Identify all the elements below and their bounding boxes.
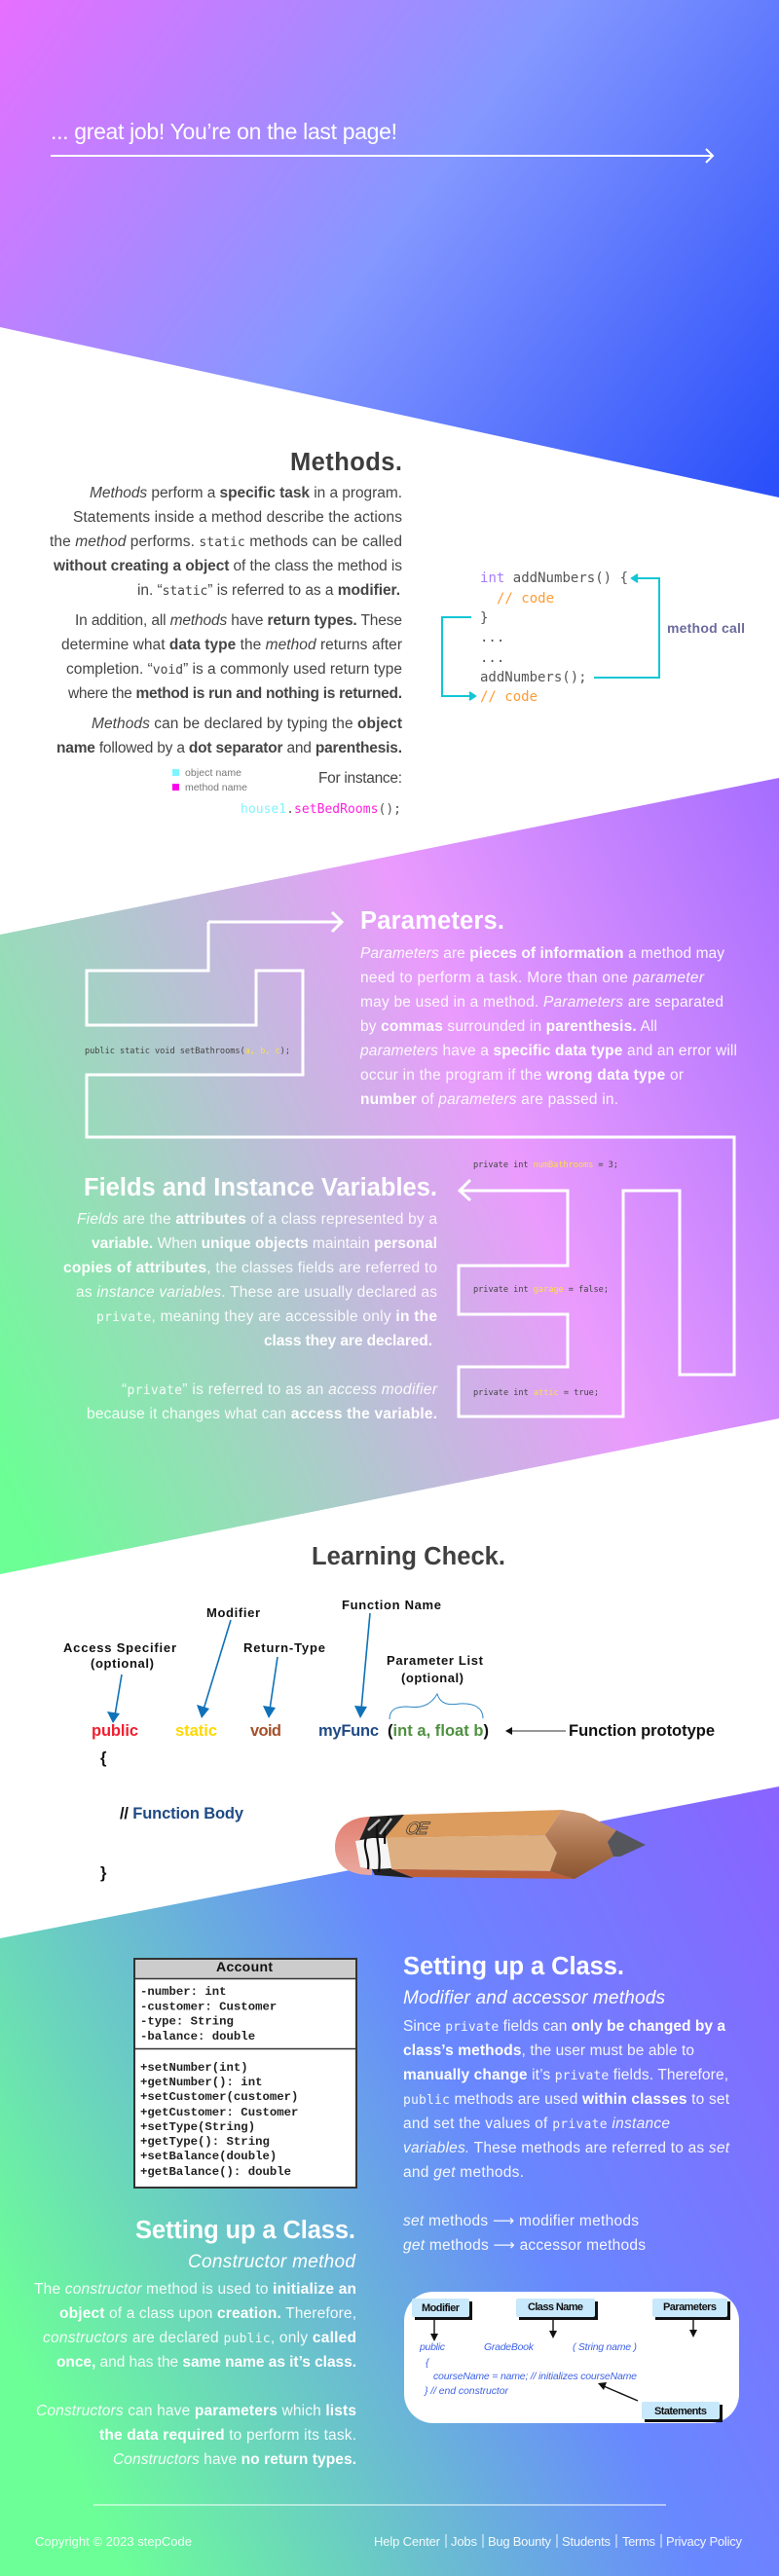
footer links: Jobs <box>451 2534 477 2549</box>
arrowhead: fields <box>460 1180 470 1200</box>
footer links: Bug Bounty <box>488 2534 551 2549</box>
code diagram: addNumbers method call: ... <box>480 650 504 666</box>
text block: Constructors have no return types. <box>113 2451 356 2468</box>
text block: and set the values of private instance <box>403 2116 670 2132</box>
diagram: constructor anatomy <box>404 2292 739 2423</box>
panel: setting up a class, modifier and accessor <box>403 1953 730 2254</box>
panel: parameters text <box>359 907 737 1108</box>
attributes: -customer: Customer <box>140 2000 277 2013</box>
text block: methods intro: the method performs. static methods can be called <box>50 534 402 550</box>
text block: fields body: private, meaning they are accessible only in the <box>96 1308 437 1325</box>
footer links: Terms <box>622 2534 656 2549</box>
callout: Statements: Statements <box>654 2406 707 2417</box>
panel: top gradient banner <box>0 0 779 497</box>
text block: return types <box>61 612 402 702</box>
code: constructor: public <box>419 2341 446 2353</box>
code: constructor: GradeBook <box>484 2341 535 2353</box>
diagram: Account class table <box>134 1959 356 2188</box>
text block: The constructor method is used to initialize an <box>34 2281 356 2298</box>
code diagram: addNumbers method call: // code <box>480 689 538 705</box>
text block: methods intro: without creating a object of the class the method is <box>53 558 402 574</box>
diagram: function prototype <box>63 1598 715 1882</box>
methods list: +getType(): String <box>140 2135 270 2149</box>
heading: Setting up a Class. <box>403 1953 624 1980</box>
callout: Class Name: Class Name <box>528 2301 583 2313</box>
code: function body: { <box>100 1749 107 1767</box>
callout: Modifier <box>412 2299 472 2320</box>
code: function prototype tokens <box>92 1722 715 1740</box>
text block: declaring methods <box>56 716 402 787</box>
code: method call example: house1.setBedRooms(); <box>241 802 401 817</box>
legend: object and method name <box>172 767 247 793</box>
text block: Since private fields can only be changed by a <box>403 2018 725 2035</box>
methods list: +setNumber(int) <box>140 2061 248 2075</box>
code diagram: addNumbers method call: } <box>480 610 488 626</box>
text block <box>403 2018 730 2254</box>
panel: parameters and fields gradient band <box>0 778 779 1574</box>
label: method call: method call <box>667 620 745 636</box>
arrows: labels to tokens <box>107 1613 370 1723</box>
footer <box>35 2504 742 2549</box>
text block: return types: completion. “void” is a commonly used return type <box>66 661 402 678</box>
code diagram: addNumbers method call: // code <box>497 591 554 607</box>
arrow: call to method <box>594 574 659 678</box>
heading: Methods: Methods. <box>290 449 402 476</box>
heading: Setting up a Class. <box>135 2217 355 2244</box>
attributes: -balance: double <box>140 2030 255 2043</box>
code: function prototype tokens: void <box>250 1722 281 1740</box>
text block: parameters body: by commas surrounded in parenthesis. All <box>360 1018 657 1035</box>
arrow: return from method <box>442 617 475 700</box>
methods list: +getCustomer: Customer <box>140 2106 298 2119</box>
text block: constructors are declared public, only called <box>43 2330 356 2346</box>
attributes <box>140 1985 277 2043</box>
text block: methods intro: Methods perform a specific task in a program. <box>90 485 402 501</box>
code: function prototype tokens: Function prototype <box>569 1722 715 1740</box>
footer links: Help Center <box>374 2534 441 2549</box>
methods list: +setType(String) <box>140 2120 255 2134</box>
brace: parameter list <box>390 1694 483 1719</box>
footer links: Privacy Policy <box>666 2534 742 2549</box>
text block: fields body <box>63 1211 438 1422</box>
label: modifier: Modifier <box>206 1605 260 1620</box>
text block: fields body: because it changes what can access the variable. <box>87 1406 437 1422</box>
panel: methods text <box>50 449 402 817</box>
code: function prototype tokens: (int a, float b) <box>388 1722 489 1740</box>
text block: once, and has the same name as it’s class. <box>56 2354 356 2371</box>
subheading: Modifier and accessor methods <box>403 1988 666 2008</box>
footer links: Students <box>562 2534 612 2549</box>
attributes: -number: int <box>140 1985 227 1999</box>
text block: object of a class upon creation. Therefore, <box>59 2305 356 2322</box>
text block: set methods ⟶ modifier methods <box>403 2212 639 2229</box>
methods list: +getBalance(): double <box>140 2165 291 2179</box>
code diagram: addNumbers method call: int addNumbers() { <box>480 570 628 586</box>
label: function name: Function Name <box>342 1598 441 1612</box>
code: constructor: courseName = name; // initializes courseName <box>433 2371 637 2382</box>
attributes: -type: String <box>140 2015 234 2029</box>
callout: Modifier: Modifier <box>422 2302 461 2314</box>
panel: setting up a class, constructor <box>34 2217 356 2468</box>
code: numBathrooms: private int numBathrooms = 3; <box>473 1160 618 1170</box>
arrow: banner <box>51 149 713 163</box>
panel: fields and instance variables text <box>63 1174 438 1422</box>
code: garage: private int garage = false; <box>473 1285 609 1295</box>
code diagram: addNumbers method call <box>442 570 745 705</box>
text block: methods intro: Statements inside a method describe the actions <box>73 509 402 526</box>
text block: variables. These methods are referred to as set <box>403 2140 730 2156</box>
text block: methods intro: in. “static” is referred to as a modifier. <box>137 582 400 599</box>
text block: parameters body: Parameters are pieces of information a method may <box>360 945 724 962</box>
text: pencil marking: OE <box>402 1819 433 1838</box>
arrows: callouts to code <box>430 2320 697 2401</box>
label: Account: Account <box>216 1959 273 1974</box>
text block: Constructors can have parameters which lists <box>36 2403 356 2419</box>
text block: fields body: variable. When unique objects maintain personal <box>92 1235 437 1252</box>
heading: Parameters: Parameters. <box>360 907 504 935</box>
text block: methods intro <box>50 485 402 599</box>
subheading: Constructor method <box>188 2252 356 2272</box>
text block: public methods are used within classes to set <box>403 2091 730 2108</box>
code: function body: // Function Body <box>120 1805 244 1822</box>
text block: parameters body <box>359 945 737 1108</box>
text block: parameters body: parameters have a specific data type and an error will <box>359 1043 737 1059</box>
text block: parameters body: may be used in a method. Parameters are separated <box>360 994 723 1011</box>
text block: parameters body: need to perform a task. More than one parameter <box>360 970 705 986</box>
text block: return types: determine what data type the method returns after <box>61 637 402 653</box>
text block: and get methods. <box>403 2164 524 2181</box>
icon: pencil <box>335 1810 646 1879</box>
code: setBathrooms: public static void setBathrooms(a, b, c); <box>85 1047 290 1056</box>
text block: return types: In addition, all methods have return types. These <box>75 612 402 629</box>
copyright: Copyright © 2023 stepCode <box>35 2534 192 2549</box>
heading: Fields and Instance Variables: Fields and Instance Variables. <box>84 1174 437 1201</box>
code: function body: } <box>100 1864 107 1882</box>
text block: fields body: Fields are the attributes of a class represented by a <box>77 1211 437 1228</box>
footer links <box>374 2534 742 2549</box>
methods list: +setBalance(double) <box>140 2150 277 2163</box>
label: access specifier: Access Specifier <box>63 1640 176 1655</box>
text block: parameters body: number of parameters are passed in. <box>360 1091 618 1108</box>
arrow: winding path stem to Parameters <box>208 912 342 932</box>
text block: declaring methods: Methods can be declared by typing the object <box>92 716 402 732</box>
text block: fields body: “private” is referred to as an access modifier <box>122 1381 438 1398</box>
methods list <box>140 2061 298 2179</box>
code diagram: addNumbers method call: addNumbers(); <box>480 670 587 685</box>
text block: class’s methods, the user must be able to <box>403 2042 694 2059</box>
text block: declaring methods: name followed by a dot separator and parenthesis. <box>56 740 402 756</box>
code: constructor: } // end constructor <box>424 2385 508 2397</box>
methods list: +setCustomer(customer) <box>140 2090 298 2104</box>
code: function prototype tokens: public <box>92 1722 138 1740</box>
diagram: function prototype: (optional) <box>401 1671 464 1685</box>
heading: Learning Check: Learning Check. <box>312 1543 505 1570</box>
text block: parameters body: occur in the program if the wrong data type or <box>360 1067 684 1084</box>
diagram: function prototype: (optional) <box>91 1656 154 1671</box>
text block: fields body: class they are declared. <box>264 1333 432 1349</box>
callout: Statements <box>642 2402 723 2422</box>
text block: return types: where the method is run and nothing is returned. <box>67 685 402 702</box>
code: function body <box>100 1749 244 1882</box>
text block: declaring methods: For instance: <box>318 770 402 787</box>
callout: Parameters <box>652 2299 730 2320</box>
legend: object and method name: object name <box>185 767 241 779</box>
panel: setting up a class gradient band <box>0 1786 779 2576</box>
code: constructor: { <box>426 2357 430 2369</box>
text block: the data required to perform its task. <box>99 2427 356 2444</box>
text block <box>34 2281 356 2468</box>
callout: Parameters: Parameters <box>663 2301 717 2313</box>
text block: fields body: as instance variables. These are usually declared as <box>76 1284 437 1301</box>
code: constructor: ( String name ) <box>573 2341 637 2353</box>
text block: manually change it’s private fields. Therefore, <box>403 2067 728 2083</box>
text block: fields body: copies of attributes, the classes fields are referred to <box>63 1260 437 1276</box>
callout: Class Name <box>516 2299 598 2320</box>
text block: get methods ⟶ accessor methods <box>403 2236 646 2254</box>
code: attic: private int attic = true; <box>473 1388 599 1398</box>
label: return type: Return-Type <box>243 1640 325 1655</box>
legend: object and method name: method name <box>185 782 247 793</box>
methods list: +getNumber(): int <box>140 2076 262 2089</box>
arrow: function prototype <box>505 1727 566 1735</box>
code: function prototype tokens: static <box>175 1722 217 1740</box>
code: function prototype tokens: myFunc <box>318 1722 379 1740</box>
code diagram: addNumbers method call: ... <box>480 630 504 645</box>
label: parameter list: Parameter List <box>387 1653 484 1668</box>
banner message: ... great job! You’re on the last page! <box>51 119 397 144</box>
arrow: winding path from code to Parameters <box>87 922 734 1417</box>
code: constructor <box>419 2341 637 2397</box>
